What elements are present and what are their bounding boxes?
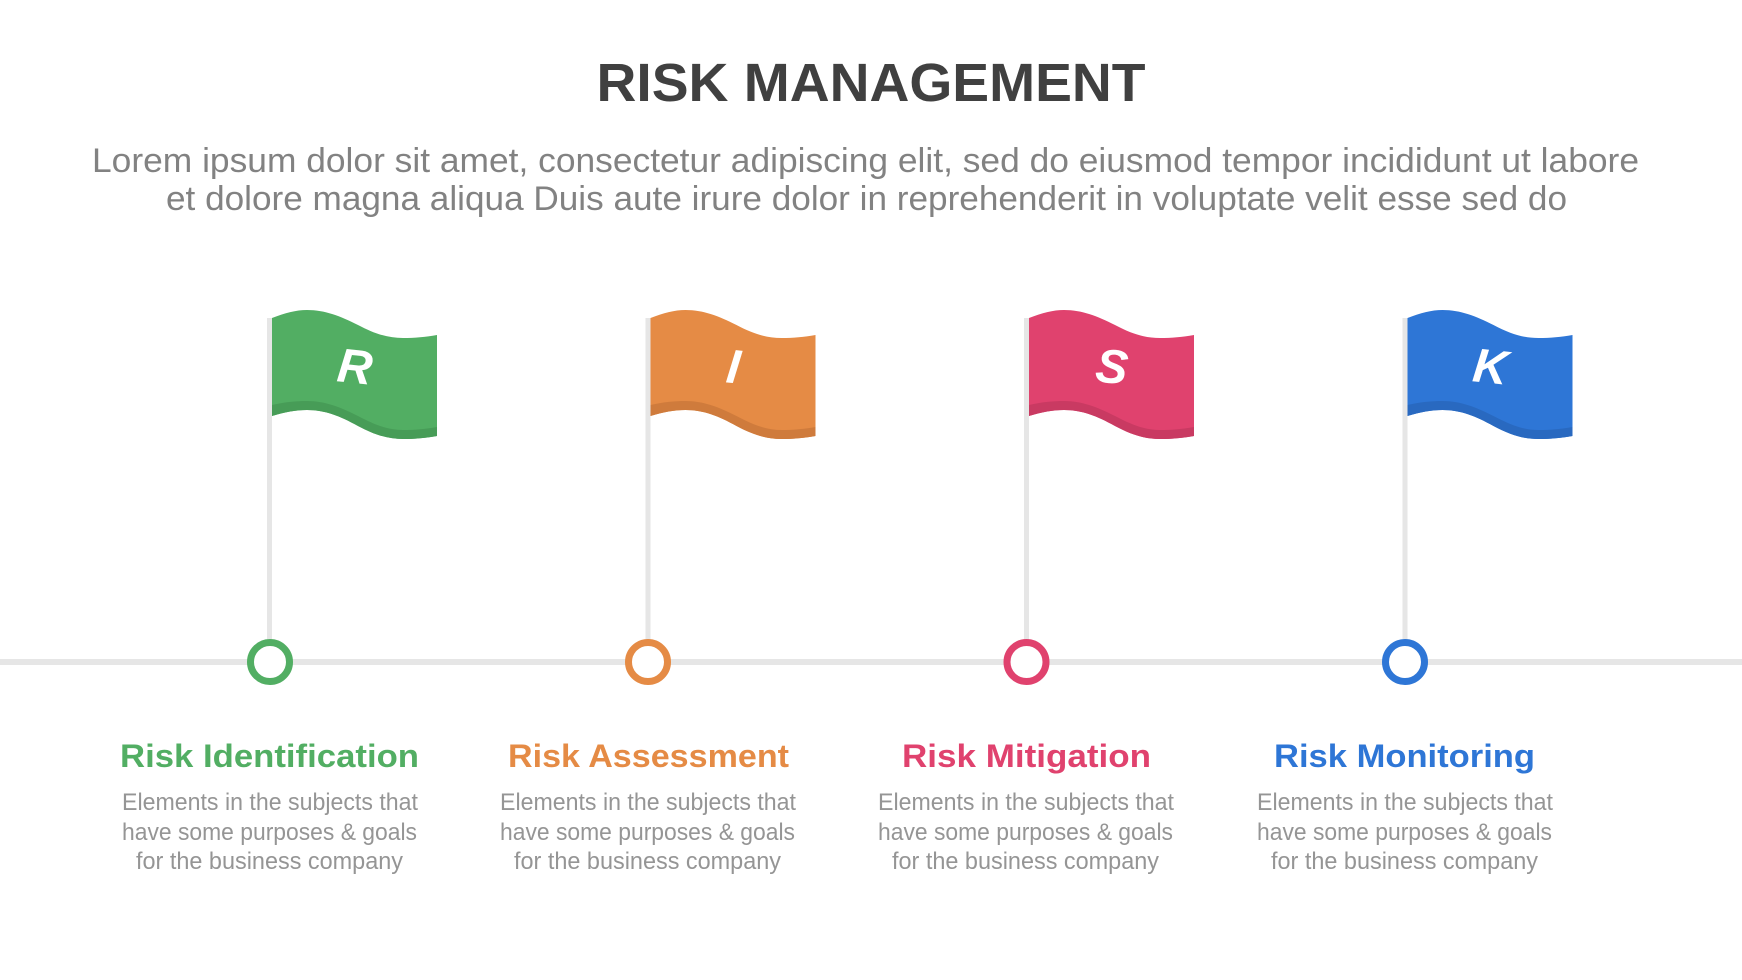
description 2: have some purposes & goals	[500, 819, 795, 846]
step 1: Risk Identification	[120, 310, 437, 875]
ring marker 1	[250, 642, 290, 682]
flag pole 1	[267, 318, 272, 643]
description 1	[122, 789, 418, 875]
flag R	[272, 310, 437, 439]
heading 1: Risk Identification	[120, 738, 419, 774]
description 4: have some purposes & goals	[1257, 819, 1552, 846]
description 3: have some purposes & goals	[878, 819, 1173, 846]
step 2: Risk Assessment	[500, 310, 816, 875]
ring marker 3	[1007, 642, 1046, 682]
flag I: I	[724, 340, 744, 395]
title: RISK MANAGEMENT	[596, 53, 1146, 113]
flag S: S	[1093, 339, 1131, 396]
description 4: for the business company	[1271, 848, 1539, 875]
ring marker 2	[628, 642, 668, 682]
flag pole 3	[1024, 318, 1029, 643]
ring marker 4	[1386, 642, 1424, 682]
flag K	[1408, 310, 1572, 439]
timeline line	[0, 659, 1742, 665]
heading 4: Risk Monitoring	[1274, 738, 1535, 774]
flag S	[1029, 310, 1194, 439]
heading 2: Risk Assessment	[508, 738, 789, 774]
step 4: Risk Monitoring	[1257, 310, 1572, 875]
description 2: for the business company	[514, 848, 782, 875]
description 2: Elements in the subjects that	[500, 789, 796, 816]
subtitle text: Lorem ipsum dolor sit amet, consectetur adipiscing elit, sed do eiusmod tempor incididunt ut labore	[92, 142, 1639, 180]
description 3: Elements in the subjects that	[878, 789, 1174, 816]
description 4	[1257, 789, 1553, 875]
flag R: R	[335, 339, 375, 396]
description 1: Elements in the subjects that	[122, 789, 418, 816]
description 3	[878, 789, 1174, 875]
description 1: for the business company	[136, 848, 404, 875]
description 2	[500, 789, 796, 875]
flag K: K	[1470, 339, 1514, 396]
flag pole 4	[1402, 318, 1408, 643]
step 3: Risk Mitigation	[878, 310, 1194, 875]
description 1: have some purposes & goals	[122, 819, 417, 846]
heading 3: Risk Mitigation	[902, 738, 1151, 774]
description 3: for the business company	[892, 848, 1160, 875]
description 4: Elements in the subjects that	[1257, 789, 1553, 816]
flag pole 2	[646, 318, 650, 643]
subtitle text: et dolore magna aliqua Duis aute irure dolor in reprehenderit in voluptate velit esse sed do	[166, 180, 1567, 218]
flag I	[650, 310, 816, 439]
subtitle text	[92, 142, 1639, 218]
